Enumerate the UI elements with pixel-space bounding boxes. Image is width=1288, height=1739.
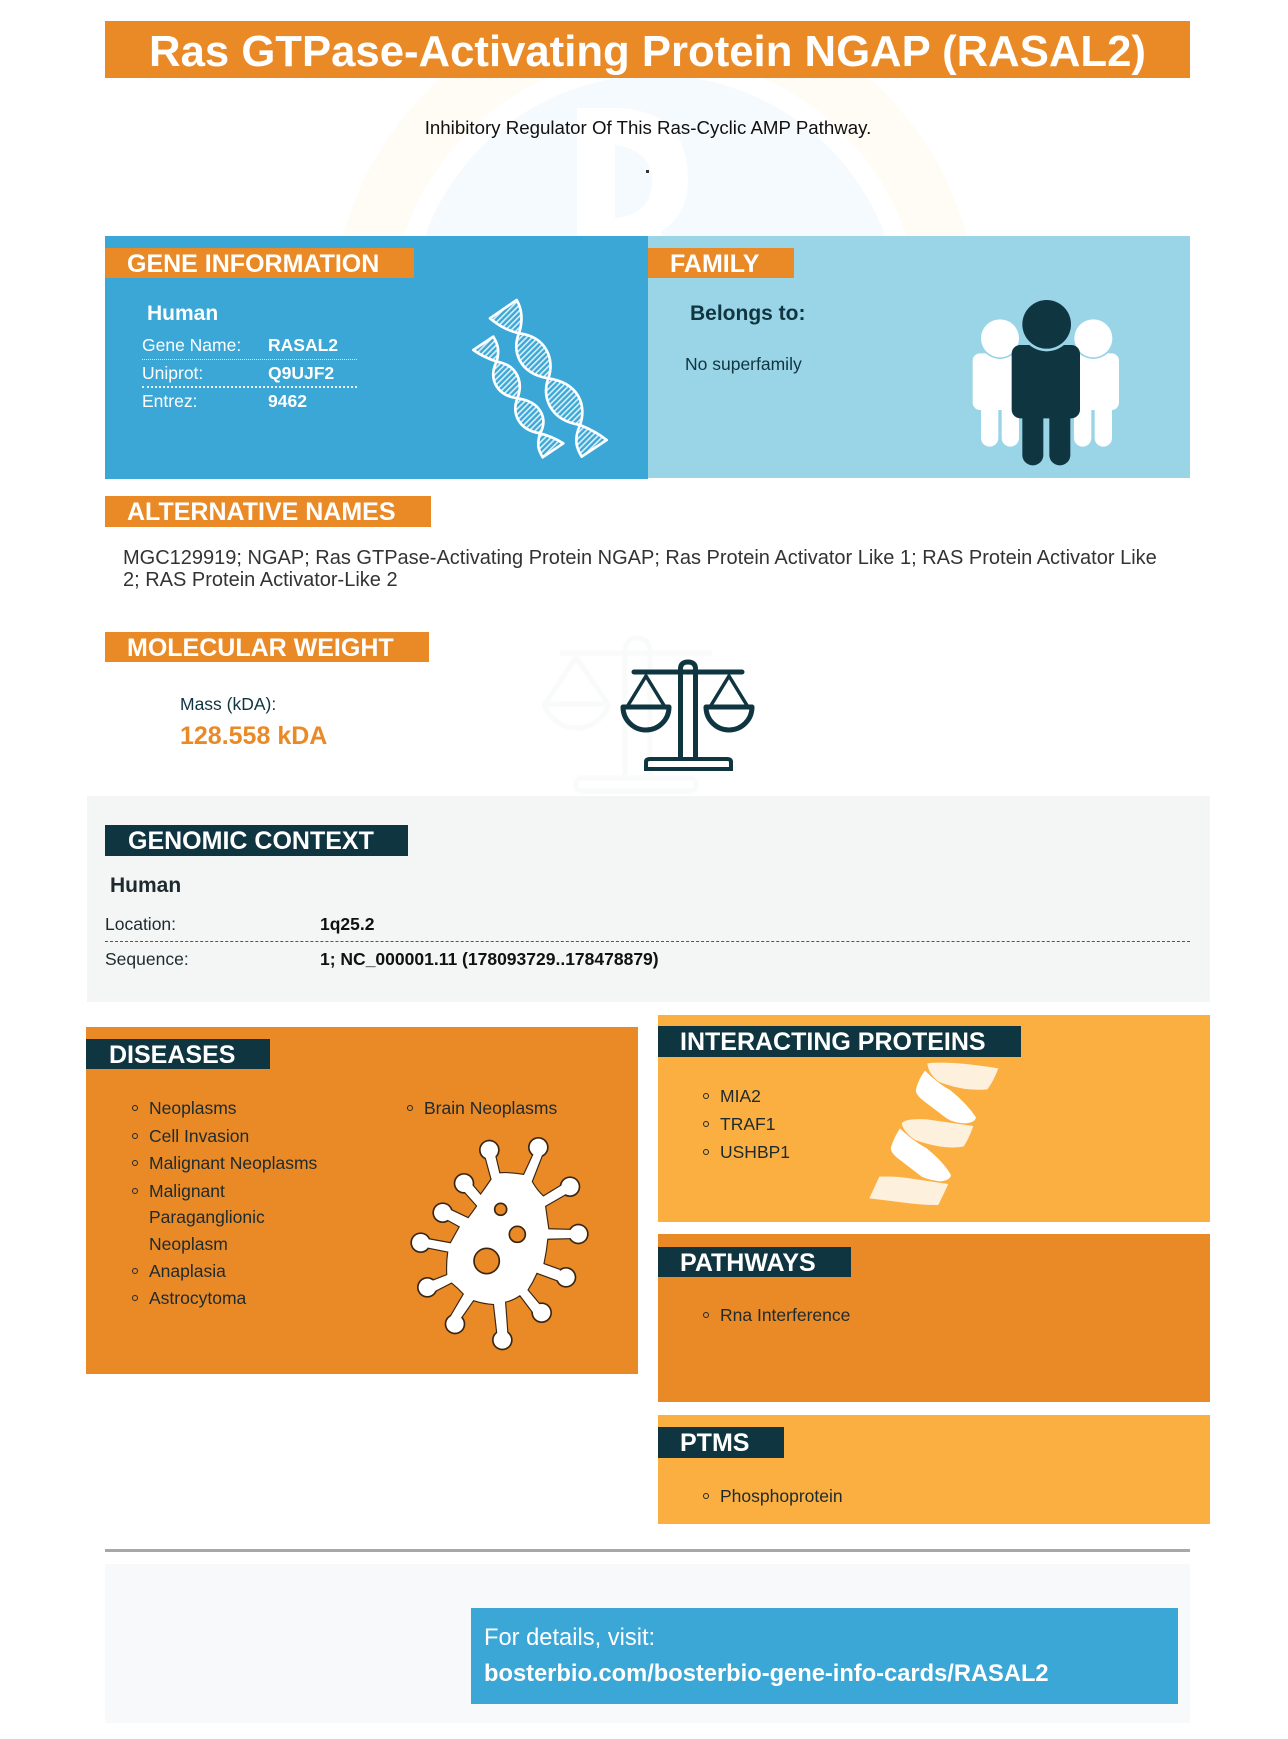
heading: molecular weight: MOLECULAR WEIGHT [127,634,394,662]
disease list [132,1098,317,1308]
belongs to label: Belongs to: [690,302,806,325]
panel: gene information [105,236,648,479]
panel: genomic context [87,796,1210,1002]
species label: Human [110,874,181,897]
protein list: USHBP1 [720,1142,790,1162]
details label: For details, visit: [484,1625,655,1651]
panel: family [648,236,1190,478]
heading: ptms: PTMS [680,1429,749,1457]
subtitle: Inhibitory Regulator Of This Ras-Cyclic AMP Pathway. [425,117,871,138]
disease list: Neoplasm [149,1234,228,1254]
watermark logo [344,78,966,236]
sequence row: Sequence: [105,949,189,969]
mass value: 128.558 kDA [180,722,327,750]
heading: genomic context: GENOMIC CONTEXT [128,827,374,855]
heading: pathways: PATHWAYS [680,1249,816,1277]
disease list: Neoplasms [149,1098,237,1118]
alternative names text: MGC129919; NGAP; Ras GTPase-Activating Protein NGAP; Ras Protein Activator Like 1; RAS Protein Activator Like 2; RAS Protein Activator-Like 2 [123,547,1157,591]
icon: scales watermark [540,635,715,795]
heading: gene information: GENE INFORMATION [127,250,379,278]
disease list: Malignant [149,1181,225,1201]
heading: alternative names: ALTERNATIVE NAMES [127,498,396,526]
details url: bosterbio.com/bosterbio-gene-info-cards/RASAL2 [484,1661,1049,1687]
panel: diseases [86,1027,638,1374]
entrez row [142,391,307,411]
entrez row: 9462 [268,391,307,411]
heading: ptms [658,1427,784,1458]
title: Ras GTPase-Activating Protein NGAP (RASAL2) [149,27,1146,76]
heading: pathways [658,1247,851,1277]
icon: people group [972,300,1119,466]
icon: protein ribbon [869,1062,998,1205]
disease list: Malignant Neoplasms [149,1153,317,1173]
protein list [703,1086,790,1162]
uniprot row [142,361,357,388]
disease list: Cell Invasion [149,1126,249,1146]
disease list: Anaplasia [149,1261,226,1281]
uniprot row: Q9UJF2 [268,363,334,383]
sequence row [105,949,659,969]
pathway item: Rna Interference [720,1305,850,1325]
icon: dna helix [472,298,608,459]
location row: Location: [105,914,176,934]
protein list: TRAF1 [720,1114,775,1134]
panel: interacting proteins [658,1015,1210,1222]
heading: family: FAMILY [670,250,759,278]
gene name row: RASAL2 [268,335,338,355]
superfamily text: No superfamily [685,354,802,374]
heading: interacting proteins: INTERACTING PROTEINS [680,1028,986,1056]
heading: diseases: DISEASES [109,1041,235,1069]
species label: Human [147,302,218,325]
gene name row [142,334,357,360]
callout: details link [471,1608,1178,1704]
location row [105,912,1190,942]
panel: footer [105,1564,1190,1723]
ptm item: Phosphoprotein [720,1486,843,1506]
heading: family [648,248,794,278]
protein list: MIA2 [720,1086,761,1106]
location row: 1q25.2 [320,914,374,934]
entrez row: Entrez: [142,391,197,411]
gene name row: Gene Name: [142,335,241,355]
disease list column two: Brain Neoplasms [424,1098,557,1118]
disease list: Paraganglionic [149,1207,265,1227]
uniprot row: Uniprot: [142,363,203,383]
panel: pathways [658,1234,1210,1402]
dot [646,170,649,173]
heading: diseases [86,1039,270,1069]
mass label: Mass (kDA): [180,694,276,714]
icon: virus [410,1137,589,1350]
sequence row: 1; NC_000001.11 (178093729..178478879) [320,949,659,969]
panel: ptms [658,1415,1210,1524]
disease list: Astrocytoma [149,1288,246,1308]
icon: scales [620,660,754,771]
